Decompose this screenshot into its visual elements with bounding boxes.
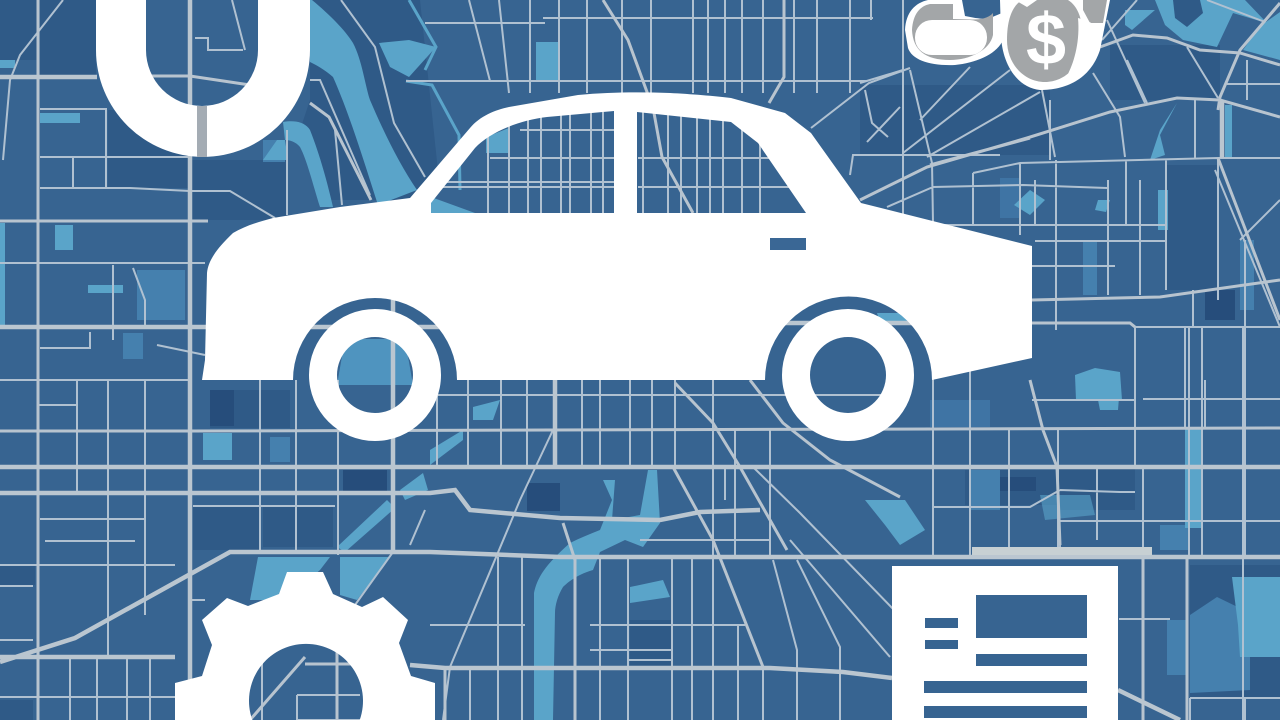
icon: gear <box>175 572 435 720</box>
coin <box>1000 0 1110 90</box>
medium patches <box>123 140 1254 693</box>
icon: padlock shackle <box>96 0 310 157</box>
thin water courses <box>406 0 460 190</box>
door handle <box>770 238 806 250</box>
icon: document <box>892 566 1118 720</box>
icon: car <box>202 92 1032 441</box>
wallet <box>905 0 1002 65</box>
rear wheel <box>309 309 441 441</box>
icon: wallet and dollar coin <box>905 0 1110 90</box>
top right water <box>1155 0 1280 60</box>
car body with windows <box>202 92 1032 380</box>
front wheel <box>782 309 914 441</box>
dollar sign: $ <box>1026 0 1066 80</box>
